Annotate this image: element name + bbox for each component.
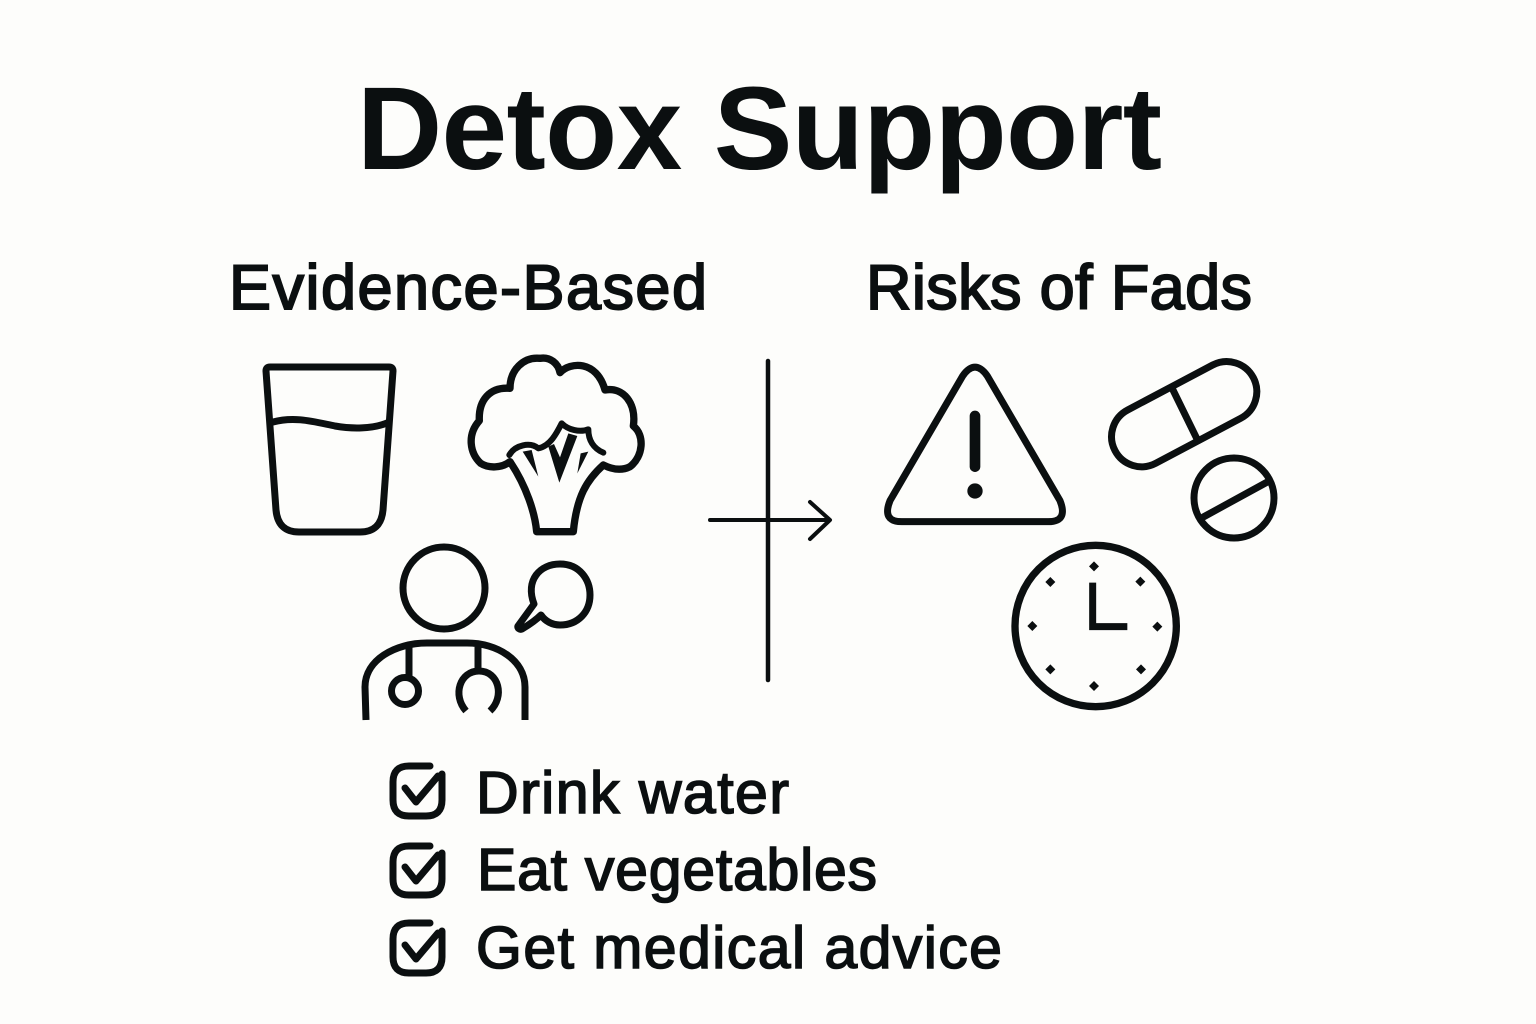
checklist item: drink water: Drink water — [476, 760, 789, 826]
checkbox icon — [393, 846, 442, 895]
checklist item: get medical advice: Get medical advice — [476, 915, 1002, 981]
doctor head — [403, 547, 485, 629]
divider line — [766, 361, 770, 680]
icon: capsule pill — [1112, 362, 1257, 467]
icon: warning triangle — [888, 367, 1062, 522]
checkbox icon — [393, 766, 442, 816]
arrow — [710, 502, 830, 539]
icon: clock — [1015, 545, 1176, 707]
heading: risks of fads: Risks of Fads — [866, 253, 1252, 323]
heading: evidence-based: Evidence-Based — [229, 253, 707, 323]
icon: doctor with stethoscope — [365, 547, 525, 720]
icon: round tablet — [1194, 458, 1274, 538]
icon: broccoli — [471, 358, 641, 532]
exclamation mark — [967, 416, 983, 499]
icon: glass of water — [266, 367, 393, 532]
title: Detox Support — [357, 63, 1162, 195]
icon: speech bubble — [518, 564, 590, 629]
checklist item: eat vegetables: Eat vegetables — [477, 837, 877, 903]
doctor shoulders — [365, 643, 525, 720]
stethoscope — [409, 647, 498, 711]
checkbox icon — [393, 923, 442, 973]
